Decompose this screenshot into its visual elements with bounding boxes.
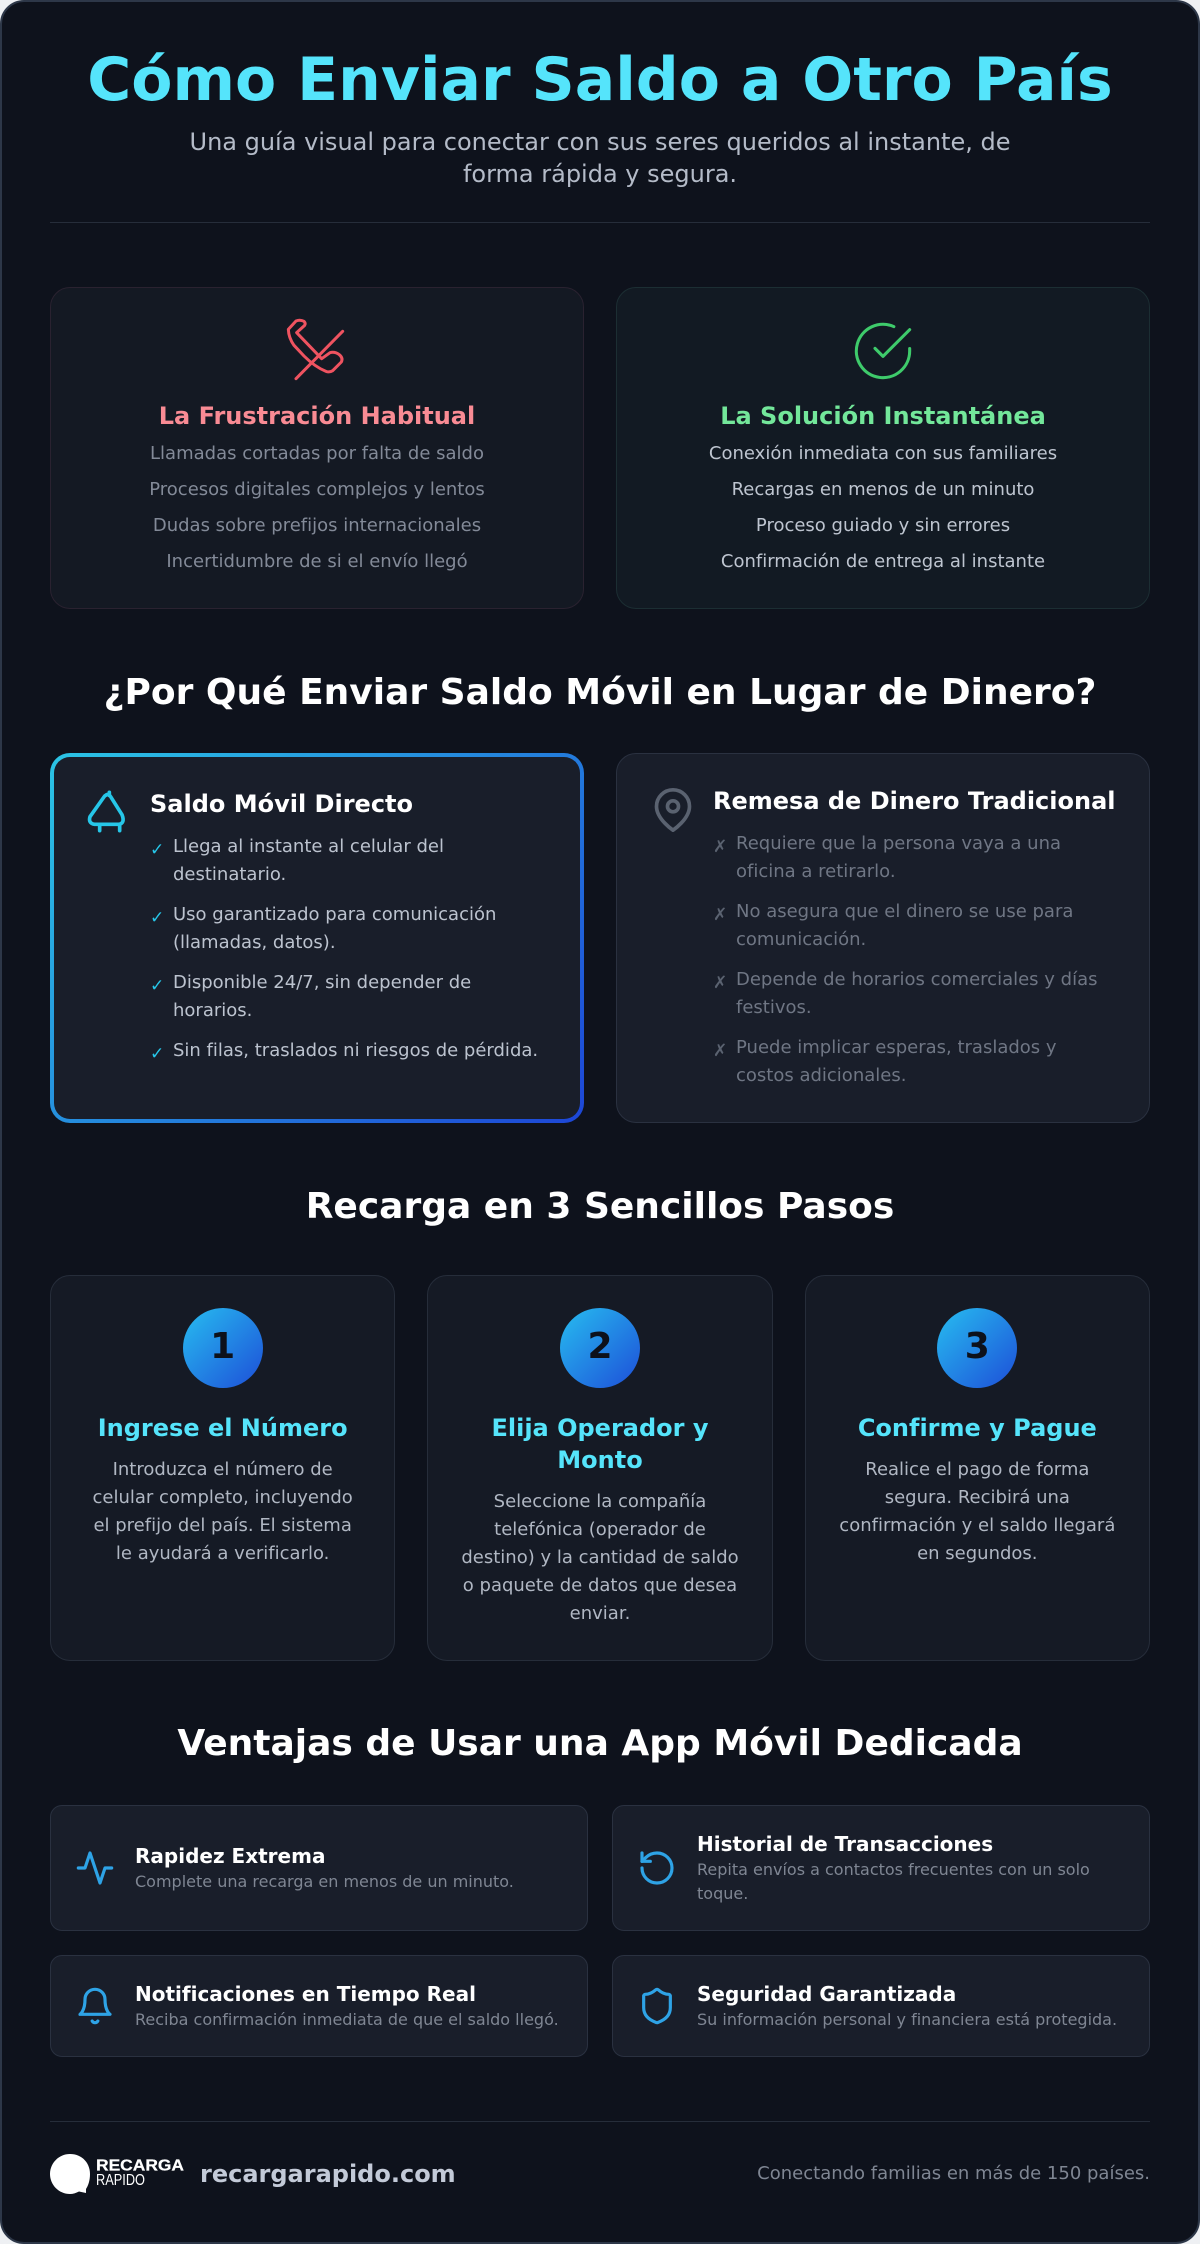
heading: La Frustración Habitual: [159, 402, 475, 430]
drawbacks list: ✗: [713, 905, 727, 925]
panel: paso 2: [427, 1275, 773, 1661]
drawbacks list: No asegura que el dinero se use para: [736, 901, 1073, 922]
heading: por qué: ¿Por Qué Enviar Saldo Móvil en Lugar de Dinero?: [104, 672, 1096, 713]
icon: activity: [76, 1851, 114, 1885]
heading: pasos: Recarga en 3 Sencillos Pasos: [306, 1186, 894, 1227]
subtitle: Una guía visual para conectar con sus seres queridos al instante, de: [190, 128, 1010, 156]
panel: paso 1: [50, 1275, 395, 1661]
text: toque.: [697, 1884, 748, 1903]
drawbacks list: ✗: [713, 1041, 727, 1061]
text: Repita envíos a contactos frecuentes con un solo: [697, 1860, 1090, 1879]
step text: Introduzca el número de: [113, 1459, 333, 1480]
drawbacks list: ✗: [713, 973, 727, 993]
panel: la solución instantánea: [616, 287, 1150, 609]
icon: phone off: [286, 318, 344, 380]
problem list: Dudas sobre prefijos internacionales: [153, 515, 481, 536]
heading: La Solución Instantánea: [720, 402, 1046, 430]
text: Reciba confirmación inmediata de que el saldo llegó.: [135, 2010, 559, 2029]
benefits list: Sin filas, traslados ni riesgos de pérdida.: [173, 1040, 538, 1061]
benefits list: destinatario.: [173, 864, 286, 885]
drawbacks list: oficina a retirarlo.: [736, 861, 896, 882]
website: recargarapido.com: [200, 2160, 456, 2188]
step text: Seleccione la compañía: [494, 1491, 706, 1512]
icon: bell: [78, 1988, 112, 2024]
text: [697, 1860, 1090, 1903]
drawbacks list: Puede implicar esperas, traslados y: [736, 1037, 1057, 1058]
benefits list: horarios.: [173, 1000, 252, 1021]
subtitle: [190, 128, 1010, 188]
icon: map pin: [654, 788, 692, 832]
drawbacks list: Depende de horarios comerciales y días: [736, 969, 1098, 990]
step text: [93, 1459, 353, 1564]
panel: historial: [612, 1805, 1150, 1931]
step text: le ayudará a verificarlo.: [116, 1543, 329, 1564]
step number: 2: [587, 1326, 613, 1367]
benefits list: Llega al instante al celular del: [173, 836, 444, 857]
step text: enviar.: [570, 1603, 630, 1624]
solution list: Recargas en menos de un minuto: [732, 479, 1034, 500]
heading: Remesa de Dinero Tradicional: [713, 787, 1116, 815]
step text: [461, 1491, 739, 1624]
solution list: Proceso guiado y sin errores: [756, 515, 1010, 536]
benefits list: Disponible 24/7, sin depender de: [173, 972, 471, 993]
step number: [937, 1308, 1017, 1388]
title: Seguridad Garantizada: [697, 1982, 956, 2006]
step text: segura. Recibirá una: [885, 1487, 1070, 1508]
solution list: [709, 443, 1057, 572]
step text: celular completo, incluyendo: [93, 1487, 353, 1508]
drawbacks list: comunicación.: [736, 929, 866, 950]
panel: seguridad: [612, 1955, 1150, 2057]
step text: o paquete de datos que desea: [463, 1575, 737, 1596]
step title: Monto: [557, 1446, 643, 1474]
title: Cómo Enviar Saldo a Otro País: [87, 45, 1113, 115]
footer: [50, 2154, 1150, 2194]
text: Su información personal y financiera está protegida.: [697, 2010, 1117, 2029]
step number: 1: [210, 1326, 235, 1367]
title: Notificaciones en Tiempo Real: [135, 1982, 476, 2006]
panel: rapidez extrema: [50, 1805, 588, 1931]
benefits list: ✓: [150, 908, 164, 928]
problem list: Procesos digitales complejos y lentos: [149, 479, 485, 500]
benefits list: ✓: [150, 1044, 164, 1064]
header: [87, 45, 1113, 188]
benefits list: Uso garantizado para comunicación: [173, 904, 496, 925]
benefits list: [150, 836, 538, 1064]
solution list: Conexión inmediata con sus familiares: [709, 443, 1057, 464]
logo: RECARGA: [96, 2158, 184, 2174]
step text: en segundos.: [917, 1543, 1038, 1564]
icon: shield: [642, 1988, 672, 2024]
step text: destino) y la cantidad de saldo: [461, 1547, 739, 1568]
solution list: Confirmación de entrega al instante: [721, 551, 1045, 572]
subtitle: forma rápida y segura.: [463, 160, 737, 188]
tagline: Conectando familias en más de 150 países.: [757, 2163, 1150, 2184]
step number: [560, 1308, 640, 1388]
drawbacks list: [713, 833, 1098, 1086]
title: Historial de Transacciones: [697, 1832, 993, 1856]
panel: saldo móvil directo: [50, 753, 584, 1123]
panel: paso 3: [805, 1275, 1150, 1661]
text: Complete una recarga en menos de un minuto.: [135, 1872, 514, 1891]
step title: Elija Operador y: [491, 1414, 708, 1442]
panel: la frustración habitual: [50, 287, 584, 609]
step title: Confirme y Pague: [858, 1414, 1097, 1442]
step title: Ingrese el Número: [98, 1414, 348, 1442]
icon: saldo: [88, 790, 125, 832]
problem list: [149, 443, 485, 572]
drawbacks list: costos adicionales.: [736, 1065, 906, 1086]
step text: telefónica (operador de: [494, 1519, 706, 1540]
logo: [50, 2154, 184, 2194]
problem list: Llamadas cortadas por falta de saldo: [150, 443, 484, 464]
step number: [183, 1308, 263, 1388]
icon: rotate: [640, 1851, 674, 1885]
drawbacks list: ✗: [713, 837, 727, 857]
logo: RAPIDO: [96, 2172, 145, 2189]
step text: Realice el pago de forma: [865, 1459, 1089, 1480]
heading: Saldo Móvil Directo: [150, 790, 413, 818]
step text: el prefijo del país. El sistema: [93, 1515, 352, 1536]
drawbacks list: festivos.: [736, 997, 812, 1018]
problem list: Incertidumbre de si el envío llegó: [166, 551, 468, 572]
drawbacks list: Requiere que la persona vaya a una: [736, 833, 1061, 854]
title: Rapidez Extrema: [135, 1844, 325, 1868]
heading: ventajas: Ventajas de Usar una App Móvil Dedicada: [177, 1723, 1023, 1764]
step text: [839, 1459, 1115, 1564]
icon: check circle: [854, 322, 912, 380]
step number: 3: [965, 1326, 990, 1367]
benefits list: ✓: [150, 976, 164, 996]
step title: [491, 1414, 708, 1474]
panel: remesa tradicional: [616, 753, 1150, 1123]
step text: confirmación y el saldo llegará: [839, 1515, 1115, 1536]
panel: notificaciones: [50, 1955, 588, 2057]
benefits list: ✓: [150, 840, 164, 860]
benefits list: (llamadas, datos).: [173, 932, 336, 953]
